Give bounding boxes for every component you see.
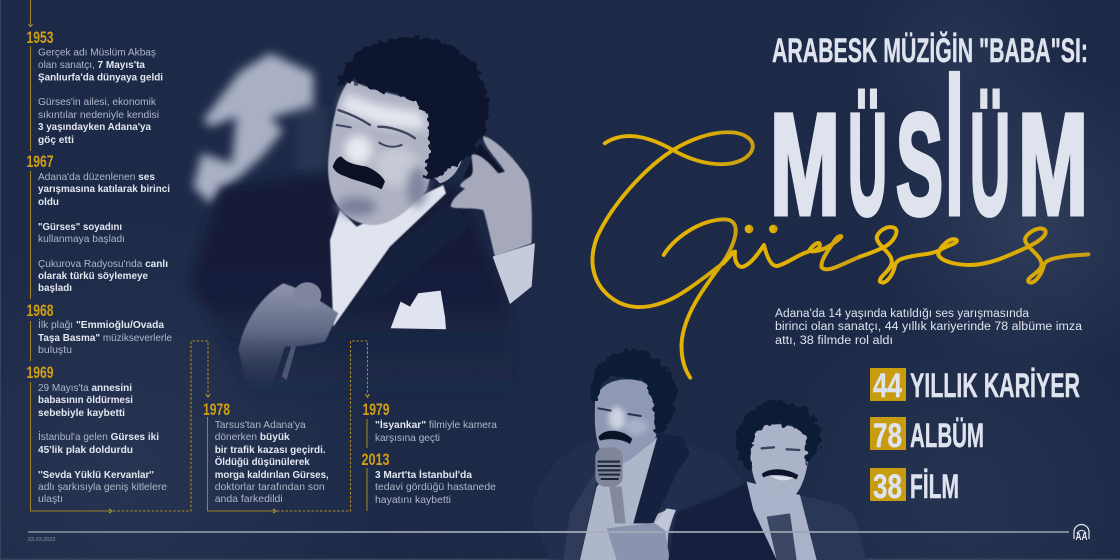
ear	[433, 145, 463, 183]
pocket square	[391, 291, 446, 329]
right figure eyes	[762, 447, 799, 450]
timeline: 1953: 3 yaşındayken Adana'ya	[38, 121, 151, 133]
timeline: 1953	[26, 28, 163, 146]
jacket	[190, 172, 513, 400]
timeline: 1969: ulaştı	[38, 493, 63, 505]
summary paragraph	[775, 308, 1083, 347]
pocket square	[655, 508, 676, 532]
hair	[338, 37, 489, 180]
face light and shade	[337, 93, 427, 216]
left figure hand	[607, 522, 670, 560]
left figure face	[595, 379, 656, 467]
timeline: 1978: anda farkedildi	[215, 493, 283, 505]
timeline: 2013: 3 Mart'ta İstanbul'da	[375, 468, 472, 481]
timeline: 1953: 1953	[26, 28, 54, 47]
microphone hand	[238, 283, 338, 393]
letters s e s	[860, 227, 1088, 283]
timeline: 1967: yarışmasına katılarak birinci	[38, 183, 170, 195]
timeline: 1978: morga kaldırılan Gürses,	[215, 469, 329, 481]
footer rule	[28, 531, 1069, 533]
title: Müslüm: M	[770, 84, 840, 245]
timeline: 2013	[362, 450, 496, 506]
right figure jacket light side	[800, 495, 867, 560]
timeline: 2013: tedavi gördüğü hastanede	[375, 481, 496, 493]
timeline: 1968: İlk plağı "Emmioğlu/Ovada	[38, 318, 164, 331]
letter G	[592, 132, 753, 378]
timeline: 1969: adlı şarkısıyla geniş kitlelere	[38, 481, 167, 493]
timeline: 1978	[203, 400, 329, 505]
timeline: 1968	[26, 301, 172, 356]
timeline: 1979: "İsyankar" filmiyle kamera	[375, 418, 497, 431]
left figure shirt	[580, 437, 675, 560]
summary paragraph: birinci olan sanatçı, 44 yıllık kariyerinde 78 albüme imza	[775, 321, 1083, 333]
timeline: 1953: Gürses'in ailesi, ekonomik	[38, 96, 157, 108]
letters ü r z	[723, 227, 860, 269]
dark area behind hand	[463, 143, 505, 190]
stat: 38 film: 38	[873, 468, 902, 506]
timeline: 1978: Öldüğü düşünülerek	[215, 455, 310, 468]
timeline: 1967: kullanmaya başladı	[38, 233, 125, 245]
right figure shirt	[747, 482, 817, 560]
timeline: 1967: Çukurova Radyosu'nda canlı	[38, 258, 168, 270]
date: 03.03.2022	[28, 537, 56, 543]
timeline: 1953: Şanlıurfa'da dünyaya geldi	[38, 72, 163, 84]
stat: 38 film: FİLM	[910, 468, 959, 506]
icon: AA logo	[1074, 524, 1089, 543]
moustache	[333, 157, 385, 189]
timeline: 1979: karşısına geçti	[375, 432, 440, 444]
photo: two portraits of Müslüm Gürses	[530, 349, 867, 560]
timeline: 1969: 45'lik plak doldurdu	[38, 444, 133, 456]
title: Müslüm: l	[945, 39, 964, 256]
icon: AA logo: AA	[1076, 531, 1088, 543]
summary paragraph: Adana'da 14 yaşında katıldığı ses yarışmasında	[775, 308, 1030, 320]
timeline: 1968: buluştu	[38, 344, 72, 356]
timeline: 2013: hayatını kaybetti	[375, 494, 451, 506]
right figure hair	[736, 401, 822, 470]
microphone head	[293, 282, 321, 308]
left figure lapel	[633, 433, 690, 523]
cuff	[493, 243, 535, 304]
timeline: 1953: sıkıntılar nedeniyle kendisi	[38, 109, 159, 121]
blurred background figure	[193, 53, 327, 203]
timeline: 1967: 1967	[26, 152, 54, 171]
timeline: 1978: 1978	[203, 400, 230, 419]
stat: 44 yıllık kariyer: 44	[873, 367, 902, 405]
timeline: 1969	[26, 363, 167, 505]
right figure smile	[770, 475, 793, 480]
timeline: 1968: 1968	[26, 301, 54, 320]
vintage microphone	[595, 447, 626, 523]
timeline: 1967	[26, 152, 170, 294]
left figure sleeve shadow	[563, 467, 598, 560]
timeline: 1967: Adana'da düzenlenen ses	[38, 171, 155, 183]
timeline: 1969: sebebiyle kaybetti	[38, 407, 125, 419]
timeline: 1967: olarak türkü söylemeye	[38, 270, 148, 282]
stat: 78 albüm	[870, 417, 984, 455]
title: Müslüm	[770, 39, 1088, 256]
timeline: 1969: İstanbul'a gelen Gürses iki	[38, 430, 159, 443]
signature: Gürses	[592, 132, 1088, 378]
timeline: 1967: oldu	[38, 196, 59, 208]
summary paragraph: attı, 38 filmde rol aldı	[775, 335, 893, 347]
raised hand	[451, 136, 532, 257]
right lapel	[338, 200, 468, 323]
left figure face light	[608, 407, 648, 435]
timeline: 2013: 2013	[362, 450, 390, 469]
timeline connectors	[28, 0, 370, 513]
stat: 78 albüm: 78	[873, 417, 902, 455]
title: Müslüm: Ü	[970, 84, 1010, 245]
right figure jacket	[668, 482, 867, 560]
right figure moustache	[762, 469, 798, 479]
right figure face	[750, 424, 809, 499]
microphone body	[282, 345, 296, 380]
timeline: 1978: Tarsus'tan Adana'ya	[215, 419, 306, 431]
timeline: 1979	[362, 400, 497, 444]
left figure jacket	[530, 435, 743, 560]
timeline: 1968: Taşa Basma" müzikseverlerle	[38, 332, 172, 344]
shirt	[330, 185, 446, 327]
eyebrows and eyes	[337, 110, 415, 147]
stat: 78 albüm: ALBÜM	[910, 417, 984, 455]
stat: 38 film	[870, 468, 959, 506]
title: Müslüm: S	[896, 84, 943, 245]
timeline: 1978: doktorlar tarafından son	[215, 481, 325, 493]
timeline: 1967: başladı	[38, 282, 72, 294]
timeline: 1978: dönerken büyük	[215, 431, 290, 443]
timeline: 1953: olan sanatçı, 7 Mayıs'ta	[38, 59, 145, 71]
timeline: 1953: göç etti	[38, 134, 74, 146]
face	[328, 80, 432, 225]
timeline: 1969: 1969	[26, 363, 54, 382]
photo: Müslüm Gürses singing with microphone	[190, 37, 535, 400]
timeline: 1967: "Gürses" soyadını	[38, 221, 122, 233]
left figure moustache	[598, 431, 632, 444]
timeline: 1979: 1979	[362, 400, 390, 419]
stat: 44 yıllık kariyer	[870, 367, 1080, 405]
right figure tie	[767, 513, 797, 560]
title: Müslüm: Ü	[848, 84, 887, 245]
timeline: 1969: babasının öldürmesi	[38, 394, 133, 406]
timeline: 1969: ''Sevda Yüklü Kervanlar''	[38, 469, 154, 481]
timeline: 1953: Gerçek adı Müslüm Akbaş	[38, 46, 156, 58]
left figure hair	[591, 349, 676, 433]
left figure eyes	[598, 408, 641, 416]
timeline: 1969: 29 Mayıs'ta annesini	[38, 382, 132, 394]
timeline: 1978: bir trafik kazası geçirdi.	[215, 444, 326, 456]
